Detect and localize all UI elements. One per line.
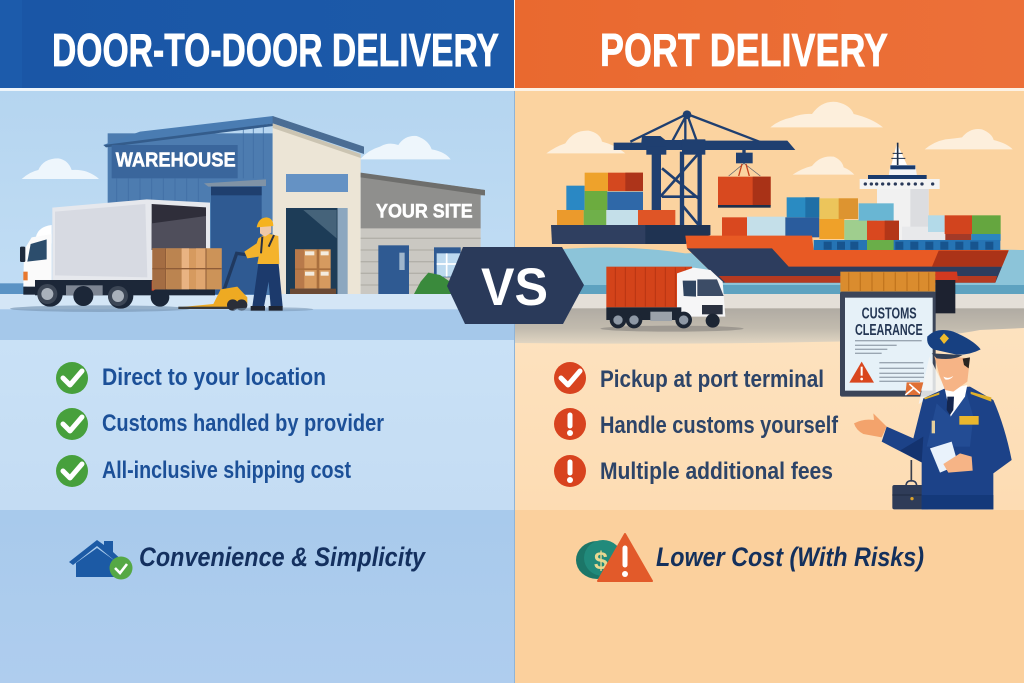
container truck (600, 267, 744, 332)
bullet: direct to your location (56, 362, 326, 394)
bullet: multiple additional fees: Multiple additional fees (600, 458, 833, 485)
delivery truck (10, 199, 222, 312)
bullet: pickup at port terminal: Pickup at port terminal (600, 366, 824, 393)
crane (630, 114, 762, 225)
cargo boxes (152, 248, 222, 289)
hanging container (718, 177, 771, 208)
officer briefcase (892, 460, 929, 509)
bullet: all-inclusive cost: All-inclusive shipping cost (102, 457, 351, 484)
container ship (685, 143, 1009, 283)
customs clearance sign (840, 292, 936, 397)
your site sign: YOUR SITE (376, 202, 473, 223)
header: port delivery: PORT DELIVERY (600, 24, 888, 76)
bullet: customs handled: Customs handled by provider (102, 410, 384, 437)
bullet: handle customs yourself: Handle customs yourself (600, 412, 839, 439)
worker (233, 217, 313, 311)
warehouse sign (112, 145, 238, 178)
customs crate and container (840, 272, 958, 313)
footer: convenience and simplicity: Convenience & Simplicity (139, 542, 427, 572)
bullet: handle customs yourself (554, 408, 839, 440)
footer: convenience and simplicity (0, 510, 514, 683)
illustration: warehouse and truck (0, 91, 514, 340)
panel: port delivery (514, 0, 1024, 683)
clouds (546, 102, 1013, 175)
list: door-to-door benefits (0, 340, 514, 510)
officer body (882, 387, 1012, 509)
barge containers (557, 173, 675, 225)
customs clearance sign: CUSTOMS (862, 306, 917, 323)
panel: door-to-door delivery (0, 0, 514, 683)
officer cap (927, 330, 981, 359)
header: port delivery (515, 0, 1024, 88)
bullet: all-inclusive cost (56, 455, 351, 487)
customs officer (854, 330, 1012, 509)
list: port delivery drawbacks (515, 328, 1024, 510)
ship superstructure (860, 143, 945, 241)
vs badge: VS (481, 258, 548, 317)
cloud right (360, 136, 451, 159)
illustration: port, crane and ship (515, 91, 1024, 345)
icon: coin and warning (576, 534, 652, 581)
footer: lower cost with risks: Lower Cost (With Risks) (656, 542, 924, 572)
bullet: pickup at port terminal (554, 362, 824, 394)
bullet: multiple additional fees (554, 455, 833, 487)
vs badge (447, 247, 584, 324)
pallet jack (178, 253, 248, 311)
your site building (361, 173, 485, 294)
bullet: direct to your location: Direct to your location (102, 364, 326, 391)
warehouse building (103, 116, 364, 295)
barge (551, 225, 710, 244)
bullet: customs handled (56, 408, 384, 440)
ship containers (722, 197, 1001, 251)
header: door-to-door (0, 0, 514, 88)
header: door-to-door: DOOR-TO-DOOR DELIVERY (52, 24, 499, 76)
ship hull (685, 236, 1009, 283)
customs clearance sign: CLEARANCE (855, 322, 923, 339)
warehouse sign: WAREHOUSE (116, 148, 236, 171)
footer: lower cost with risks (515, 510, 1024, 683)
cloud left (22, 158, 99, 179)
icon: house with check (69, 540, 132, 580)
icon: coin and warning: $ (594, 547, 608, 575)
